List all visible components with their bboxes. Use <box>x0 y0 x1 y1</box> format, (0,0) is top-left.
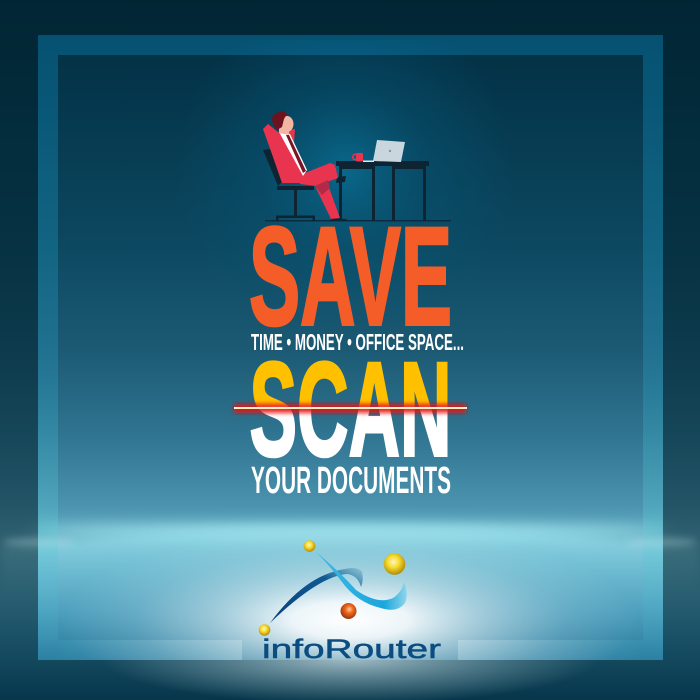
subheading: your documents: YOUR DOCUMENTS <box>251 460 451 502</box>
heading: SCAN with strike line: SCAN <box>250 336 452 484</box>
floor line <box>265 220 451 222</box>
logo: infoRouter <box>259 540 441 664</box>
illustration: man relaxing at desk <box>263 111 451 222</box>
subheading: time money office space: TIME • MONEY • OFFICE SPACE... <box>251 329 464 355</box>
heading: SCAN with strike line: SCAN <box>250 336 452 484</box>
logotype: infoRouter <box>262 634 441 664</box>
orange ball <box>340 603 356 619</box>
shoes <box>336 176 346 183</box>
neck and face <box>279 126 289 135</box>
small yellow ball bottom <box>259 624 270 636</box>
frame band <box>38 35 663 660</box>
swoosh light <box>316 552 407 610</box>
heading: SCAN with strike line <box>230 360 470 458</box>
mug <box>353 153 363 162</box>
heading: SAVE: SAVE <box>249 198 452 354</box>
far arm <box>283 129 295 143</box>
small yellow ball top <box>304 540 315 552</box>
laptop <box>363 140 405 162</box>
crossed leg <box>300 163 338 186</box>
thigh shade <box>315 180 330 195</box>
swoosh dark <box>270 568 363 623</box>
light flares and white glow <box>2 527 698 700</box>
tie <box>286 135 306 173</box>
logo side strips <box>58 640 642 660</box>
shirt <box>279 132 307 176</box>
large yellow ball <box>384 553 405 575</box>
jacket with raised arm <box>263 124 306 183</box>
lower leg <box>315 182 340 219</box>
desk <box>336 161 429 221</box>
hair <box>272 111 287 130</box>
chair <box>263 149 315 222</box>
